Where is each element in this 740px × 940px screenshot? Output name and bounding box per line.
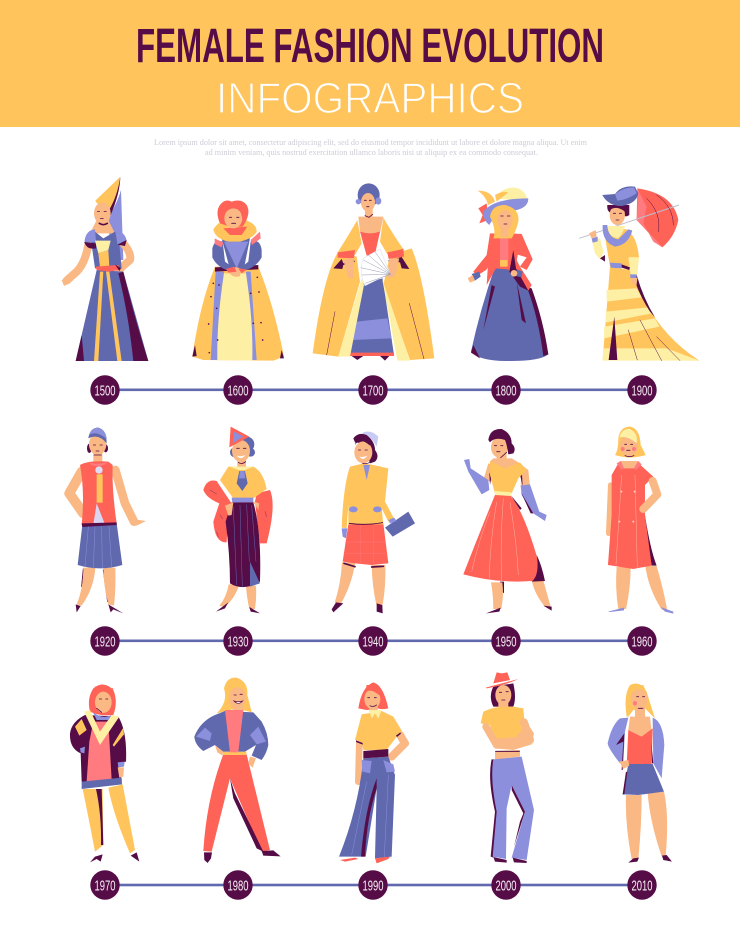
skirt (343, 523, 388, 565)
year 1990 (358, 870, 388, 900)
timeline: 1970 to 2010 (90, 870, 657, 900)
legs and shoes (82, 569, 108, 602)
bodice (215, 265, 258, 272)
pants (83, 789, 103, 852)
purse (385, 512, 415, 537)
figure: 1700 pannier gown (313, 183, 434, 361)
bodice and sleeves (603, 227, 632, 267)
hair (626, 683, 655, 718)
shirt (355, 711, 402, 750)
year 1940: 1940 (362, 633, 384, 650)
cloche hat (88, 428, 107, 443)
year 2000 (491, 870, 521, 900)
year 2010: 2010 (632, 877, 652, 894)
figure: 2000 cowboy hat and jeans (481, 672, 534, 863)
figure: 2010 cardigan and mini skirt (608, 683, 672, 863)
figure: 1950 full skirt dress with gloves (463, 429, 552, 613)
hair (89, 685, 116, 715)
year 1950: 1950 (496, 633, 516, 650)
year 1970: 1970 (94, 877, 116, 894)
vest (80, 461, 117, 525)
year 2010 (627, 870, 657, 900)
jacket (215, 745, 223, 756)
intro text: Lorem ipsum dolor sit amet, consectetur adipiscing elit, sed do eiusmod tempor incididunt ut labore et dolore magna aliqua. Ut enim (154, 138, 588, 147)
hair and face (217, 201, 248, 227)
year 1960: 1960 (632, 633, 652, 650)
figure: 1800 riding jacket and hat (468, 188, 548, 361)
figure: 1500 gown with hennin (62, 177, 148, 361)
subtitle: INFOGRAPHICS (216, 74, 524, 123)
legs and shoes (500, 582, 504, 593)
skirt (623, 764, 664, 795)
panniers (313, 252, 360, 357)
parasol (637, 188, 678, 247)
cardigan (608, 718, 628, 763)
figure: 1600 farthingale gown (192, 201, 284, 361)
year 1940 (358, 626, 388, 656)
figure: 1960 shift dress (608, 427, 673, 614)
year 1600: 1600 (228, 382, 248, 399)
bodice and gown shoulders (338, 220, 362, 255)
figure: 1980 power jacket and trousers (194, 678, 281, 863)
gloves (464, 459, 489, 494)
year 1900: 1900 (632, 382, 652, 399)
jacket (342, 463, 394, 528)
trousers (203, 754, 270, 852)
pleated skirt (78, 523, 122, 568)
year 1920: 1920 (94, 633, 116, 650)
skirt (463, 495, 543, 582)
year 1600 (223, 375, 253, 405)
year 1960 (627, 626, 657, 656)
blouse and tie (220, 467, 267, 498)
shoulders (483, 463, 493, 482)
figure: 1990 flared jeans (339, 682, 405, 863)
intro text (154, 138, 588, 157)
year 1980: 1980 (228, 877, 248, 894)
hair (230, 447, 240, 457)
bodice (490, 458, 520, 470)
veil (108, 190, 123, 260)
hennin hat (95, 177, 120, 212)
jeans (495, 750, 520, 759)
head (358, 183, 380, 207)
bodice and sleeves (90, 232, 122, 268)
figure: 1900 gown with parasol (579, 186, 699, 361)
skirt (471, 267, 548, 361)
year 1980 (223, 870, 253, 900)
fur stole (255, 490, 273, 543)
hat (229, 427, 249, 447)
figure: 1930 fur stole outfit (203, 427, 273, 613)
hair (358, 682, 388, 710)
year 1930: 1930 (228, 633, 248, 650)
figure: 1970 color-block sweater (70, 685, 139, 862)
ruff collar (213, 220, 257, 242)
arms (609, 485, 611, 533)
legs and shoes (335, 562, 355, 604)
year 1900 (627, 375, 657, 405)
year 1800: 1800 (496, 382, 516, 399)
year 2000: 2000 (496, 877, 516, 894)
year 1950 (491, 626, 521, 656)
head and hat (362, 431, 378, 447)
timeline: 1500 to 1900 (90, 375, 657, 405)
hair (217, 678, 252, 713)
figure: 1920 drop-waist outfit (69, 428, 146, 613)
hair (615, 427, 646, 457)
legs and shoes (626, 795, 642, 859)
jeans (339, 757, 395, 858)
legs and shoes (616, 567, 631, 609)
skirt (226, 502, 260, 587)
skirt (76, 270, 148, 361)
year 1930 (223, 626, 253, 656)
jacket (487, 233, 522, 285)
hair and face (490, 205, 518, 238)
year 1700: 1700 (362, 382, 384, 399)
dress (642, 483, 657, 566)
legs and shoes (219, 584, 239, 607)
hair (491, 683, 515, 707)
year 1920 (90, 626, 120, 656)
fan (361, 249, 390, 286)
year 1500: 1500 (94, 382, 116, 399)
year 1990: 1990 (362, 877, 384, 894)
head (497, 452, 507, 460)
year 1500 (90, 375, 120, 405)
year 1700 (358, 375, 388, 405)
skirt (603, 267, 699, 361)
hat (493, 672, 510, 683)
skirt (192, 267, 284, 361)
top (628, 717, 652, 737)
timeline: 1920 to 1960 (90, 626, 657, 656)
feathered hat (495, 188, 527, 202)
year 1800 (491, 375, 521, 405)
header banner (0, 0, 740, 127)
sweater (70, 715, 126, 782)
year 1970 (90, 870, 120, 900)
head and hat (607, 205, 629, 216)
intro text: ad minim veniam, quis nostrud exercitation ullamco laboris nisi ut aliquip ex ea commodo consequat. (205, 148, 538, 157)
arms (348, 743, 369, 782)
figure: 1940 jacket and skirt (332, 431, 415, 613)
shirt and crossed arms (483, 718, 534, 750)
underskirt (350, 278, 394, 355)
